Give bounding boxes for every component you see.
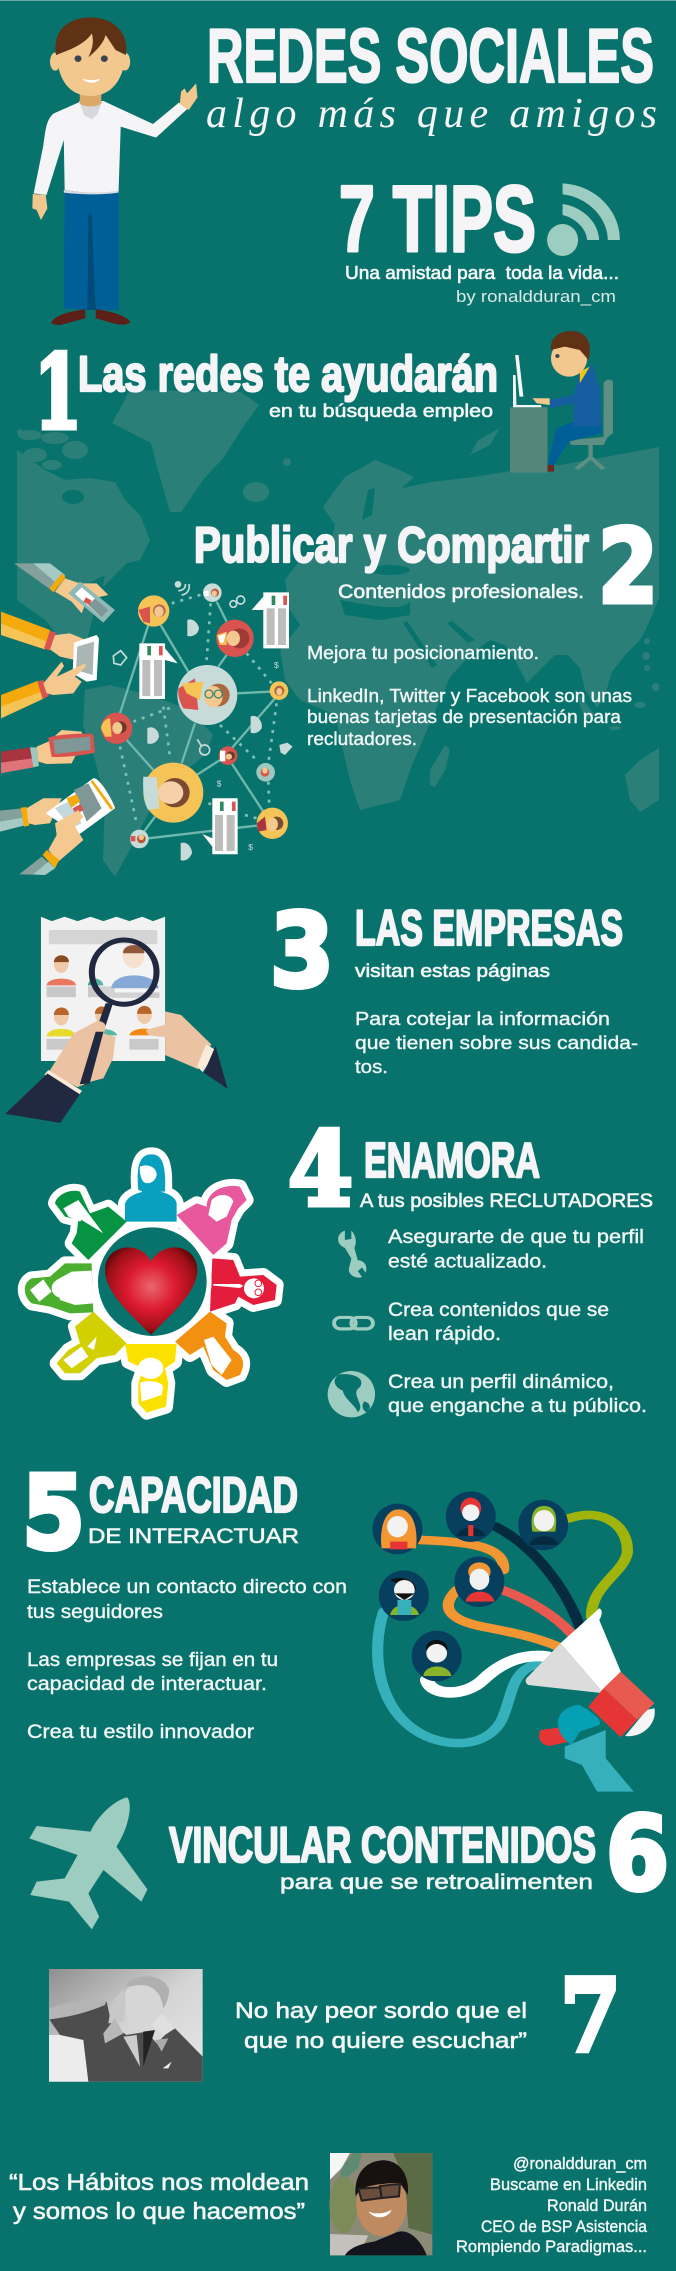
heart [105, 1247, 197, 1335]
text block: tip 2: LinkedIn, Twitter y Facebook son unas [307, 686, 632, 706]
illustration: megaphone with people [372, 1491, 655, 1792]
tip: dynamic profile: Crea un perfil dinámico, [388, 1372, 614, 1393]
tip: keep profile updated: esté actualizado. [388, 1252, 547, 1272]
hand [565, 1730, 634, 1792]
neck and head [80, 90, 101, 106]
yellow person [125, 1344, 177, 1413]
icon: airplane [29, 1797, 147, 1929]
closing quote: y somos lo que hacemos” [13, 2198, 305, 2224]
person 4 [390, 1578, 416, 1590]
olive person [57, 1312, 127, 1373]
node circles [138, 595, 169, 627]
tip: keep profile updated: Asegurarte de que tu perfil [388, 1227, 644, 1248]
closing quote [9, 2169, 309, 2224]
number 6: 6 [606, 1795, 669, 1914]
person 3 [532, 1506, 556, 1532]
illustration: presenter man [32, 17, 197, 325]
author details: CEO de BSP Asistencia [481, 2217, 647, 2236]
light green person [25, 1263, 93, 1313]
quote: tip 7 [235, 1998, 527, 2053]
heading: tip 5: CAPACIDAD [89, 1467, 298, 1523]
quote: tip 7: que no quiere escuchar” [244, 2028, 527, 2053]
text block: tip 3: tos. [355, 1056, 388, 1077]
heading: tip 2: Publicar y Compartir [194, 517, 589, 573]
hand 5 [0, 808, 26, 832]
tagline: Una amistad para toda la vida... [345, 263, 619, 283]
author details: Rompiendo Paradigmas... [456, 2237, 647, 2256]
illustration: CV under magnifying glass [5, 917, 228, 1123]
small icons [147, 619, 293, 861]
hands [180, 83, 197, 110]
number 4: 4 [288, 1110, 353, 1230]
subheading: tip 1: en tu búsqueda empleo [269, 400, 493, 421]
subheading: tip 2: Contenidos profesionales. [338, 581, 584, 603]
tip: dynamic profile [388, 1372, 647, 1417]
quote: tip 7: No hay peor sordo que el [235, 1998, 527, 2023]
text block: tip 3: que tienen sobre sus candida- [355, 1032, 638, 1053]
illustration: social network with hands [0, 563, 293, 875]
orange person [175, 1312, 243, 1380]
faces [138, 607, 150, 623]
subheading: tip 6: para que se retroalimenten [280, 1871, 593, 1894]
text block: tip 5 [27, 1576, 347, 1743]
text block: tip 2 [307, 643, 632, 749]
photo: man covering ears [49, 1969, 203, 2082]
tip: keep profile updated [388, 1227, 644, 1272]
author details: @ronaldduran_cm [513, 2154, 647, 2173]
megaphone [560, 1608, 621, 1693]
number 2: 2 [598, 508, 658, 627]
icon: signal waves [547, 183, 620, 256]
photo: author [329, 2153, 432, 2255]
inner seas [62, 488, 475, 668]
heading: tip 1: Las redes te ayudarán [78, 346, 498, 402]
illustration: social network with hands: $ [274, 660, 279, 670]
sweater [34, 101, 188, 195]
avatars [372, 1491, 568, 1681]
hand 3 [1, 681, 44, 718]
illustration: social network with hands: $ [217, 779, 222, 789]
byline: by ronaldduran_cm [456, 287, 616, 306]
person 5 [468, 1562, 491, 1581]
icon: globe [328, 1371, 375, 1417]
number 1: 1 [34, 333, 82, 453]
subheading: tip 3: visitan estas páginas [355, 960, 550, 981]
text block: tip 5: Las empresas se fijan en tu [27, 1649, 278, 1671]
heading: 7 tips: 7 TIPS [339, 166, 536, 271]
tip: quick content [388, 1300, 609, 1345]
author details: Ronald Durán [547, 2196, 647, 2215]
illustration: social network with hands: $ [248, 842, 253, 852]
red person [210, 1258, 277, 1312]
text block: tip 5: Crea tu estilo innovador [27, 1721, 255, 1743]
hand 4 [1, 747, 32, 763]
left hand [48, 1021, 116, 1087]
number 7: 7 [560, 1957, 621, 2075]
person 2 [460, 1498, 481, 1519]
text block: tip 5: tus seguidores [27, 1601, 163, 1623]
text block: tip 3 [355, 1008, 638, 1077]
tip: dynamic profile: que enganche a tu público. [388, 1396, 647, 1417]
author details [456, 2154, 647, 2256]
heading: tip 4: ENAMORA [364, 1134, 540, 1188]
text block: tip 5: Establece un contacto directo con [27, 1576, 347, 1598]
text block: tip 2: Mejora tu posicionamiento. [307, 643, 539, 663]
message cards [139, 592, 289, 854]
tip: quick content: lean rápido. [388, 1324, 501, 1345]
text block: tip 3: Para cotejar la información [355, 1008, 610, 1029]
dark green person [55, 1191, 127, 1260]
author details: Buscame en Linkedin [490, 2175, 647, 2194]
blue person [125, 1154, 177, 1222]
subtitle: algo más que amigos [206, 91, 657, 137]
illustration: heart with people wheel [25, 1154, 277, 1413]
number 3: 3 [270, 892, 334, 1011]
hand 6 [48, 810, 83, 862]
text block: tip 2: reclutadores. [307, 729, 417, 749]
icon: wrench [338, 1231, 366, 1278]
illustration: man at desk [510, 331, 613, 473]
person 1 [381, 1509, 417, 1548]
text block: tip 2: buenas tarjetas de presentación para [307, 707, 622, 727]
pink person [177, 1186, 247, 1255]
text block: tip 5: capacidad de interactuar. [27, 1673, 267, 1695]
icon: chain link [334, 1317, 373, 1329]
connection lines [120, 602, 275, 838]
tip: quick content: Crea contenidos que se [388, 1300, 609, 1321]
subheading: tip 4: A tus posibles RECLUTADORES [360, 1191, 653, 1212]
number 5: 5 [22, 1454, 85, 1573]
subheading: tip 5: DE INTERACTUAR [88, 1525, 299, 1548]
pants [64, 188, 119, 310]
person 6 [426, 1640, 448, 1650]
right hand [146, 1011, 211, 1069]
world map background [17, 390, 660, 877]
hand 2 [1, 612, 50, 649]
magnifier [92, 940, 156, 1004]
closing quote: “Los Hábitos nos moldean [9, 2169, 309, 2195]
hand 1 [14, 563, 65, 592]
